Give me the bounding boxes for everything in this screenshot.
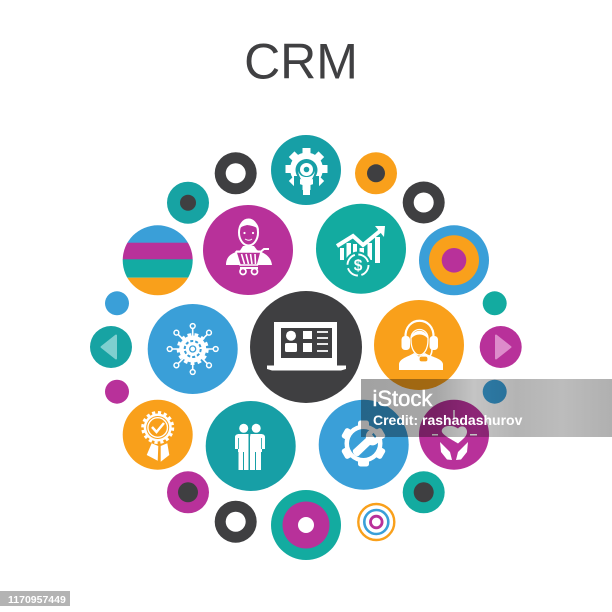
small dot: purple xyxy=(105,380,129,404)
icon: laptop with profile dashboard xyxy=(267,322,346,370)
icon: gear network xyxy=(167,324,218,374)
icon: person with shopping cart xyxy=(226,220,272,274)
decorative target circle xyxy=(419,225,489,295)
small dot: teal xyxy=(483,291,507,315)
decorative dot: purple bottom left xyxy=(167,471,209,513)
icon: award rosette xyxy=(143,412,173,462)
decorative concentric rings xyxy=(358,504,394,540)
decorative dot: orange top right xyxy=(355,152,397,194)
icon: agent with headset xyxy=(399,321,443,370)
small dot: steel blue xyxy=(483,380,507,404)
icon: heart in hands xyxy=(432,410,477,460)
watermark banner xyxy=(361,379,612,437)
panel: revenue growth xyxy=(316,204,406,294)
decorative bottom circle xyxy=(271,490,341,560)
image id tag xyxy=(0,591,70,606)
arrow: previous xyxy=(90,326,132,368)
panel: partnership xyxy=(206,401,296,491)
icon: gear with wrench hands xyxy=(286,148,328,195)
decorative ring: dark bottom left xyxy=(215,501,257,543)
panel: gear and hands icon xyxy=(271,135,341,205)
panel: network settings xyxy=(148,304,238,394)
decorative dot: teal top left xyxy=(167,182,209,224)
panel: customer with cart xyxy=(203,205,293,295)
decorative dot: teal bottom right xyxy=(403,471,445,513)
decorative striped circle xyxy=(122,225,193,296)
watermark logo text: iStock xyxy=(372,386,433,411)
title: CRM xyxy=(244,34,358,90)
panel: customer support xyxy=(374,300,464,390)
icon: chart with dollar coin: $ xyxy=(354,258,363,274)
panel: customer care xyxy=(419,400,489,470)
panel: quality award xyxy=(123,400,193,470)
decorative ring: dark top right xyxy=(403,182,445,224)
arrow: next xyxy=(480,326,522,368)
small dot: blue xyxy=(105,291,129,315)
decorative ring: dark top left xyxy=(215,152,257,194)
icon: two people xyxy=(235,424,265,470)
panel: service settings xyxy=(319,400,409,490)
icon: gear with wrench xyxy=(341,420,386,466)
image id tag: 1170957449 xyxy=(8,594,66,606)
watermark credit text: Credit: rashadashurov xyxy=(373,412,523,428)
panel: central laptop xyxy=(250,291,362,403)
